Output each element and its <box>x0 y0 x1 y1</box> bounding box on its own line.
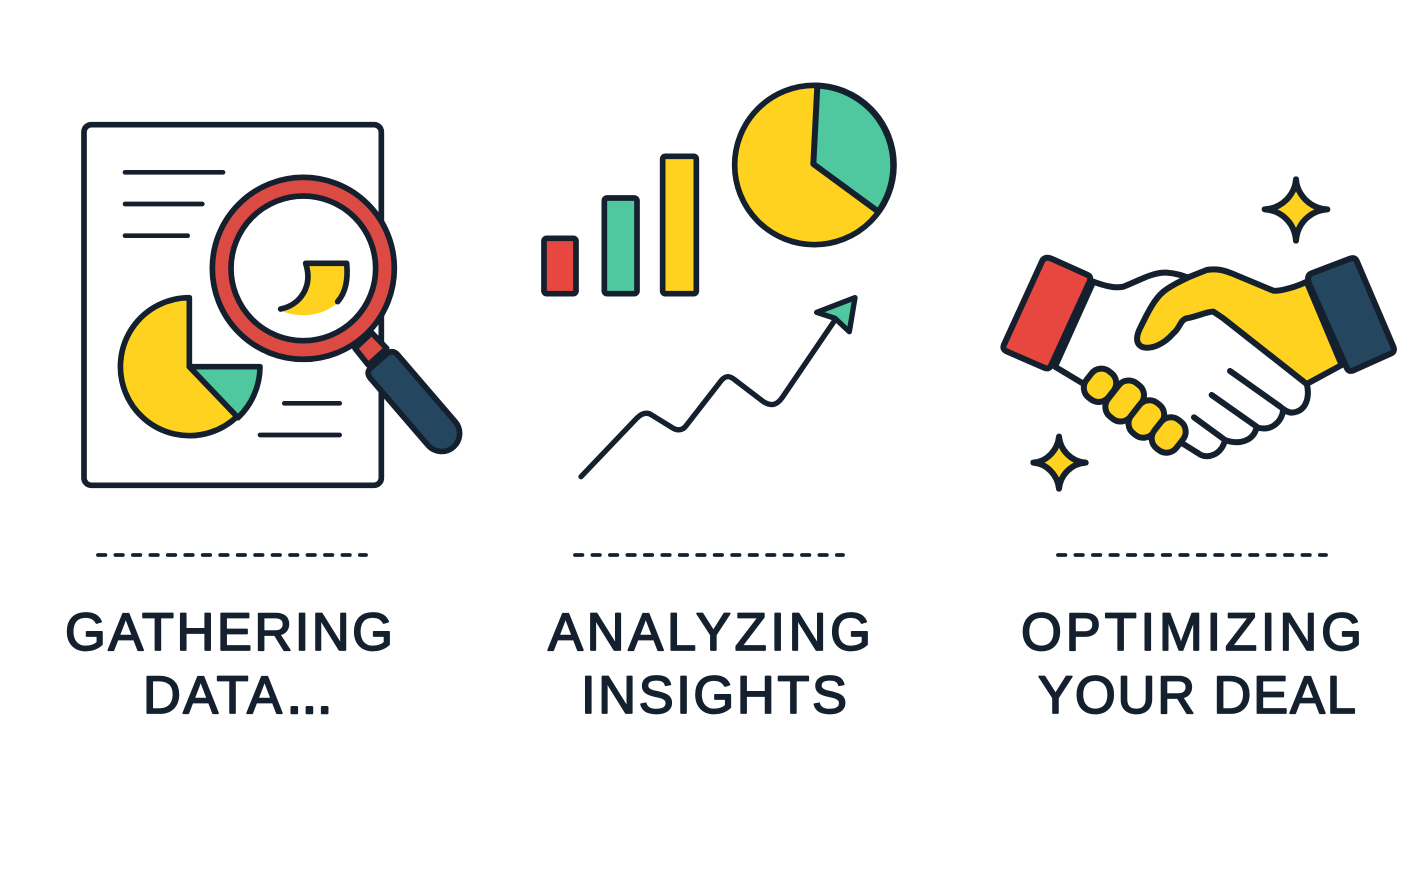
panel: gathering data icon <box>84 125 467 485</box>
heading: gathering data: GATHERING <box>65 603 393 662</box>
red cuff <box>1003 258 1090 368</box>
panel: analyzing insights icon <box>544 85 894 477</box>
heading: analyzing insights: ANALYZING <box>548 603 871 662</box>
panel: optimizing deal icon <box>1003 179 1394 489</box>
white hand <box>1055 273 1308 456</box>
heading: optimizing your deal: OPTIMIZING <box>1021 603 1362 662</box>
heading: analyzing insights <box>548 603 871 725</box>
document page <box>84 125 381 485</box>
navy cuff <box>1308 258 1394 371</box>
divider: gathering <box>98 553 366 557</box>
pie chart <box>735 85 894 245</box>
heading: gathering data: ... <box>287 666 333 725</box>
pie chart in document <box>120 298 260 436</box>
bar chart <box>544 156 696 294</box>
magnifying glass <box>212 177 467 459</box>
yellow fingers <box>1079 364 1191 458</box>
divider: analyzing <box>575 553 843 557</box>
sparkle top <box>1265 179 1327 241</box>
heading: analyzing insights: INSIGHTS <box>581 666 847 725</box>
trend arrow <box>581 298 855 477</box>
divider: optimizing <box>1058 553 1326 557</box>
document text lines <box>125 172 340 435</box>
heading: gathering data: DATA <box>143 666 282 725</box>
heading: gathering data <box>65 603 393 725</box>
sparkle bottom <box>1033 437 1086 489</box>
heading: optimizing your deal <box>1021 603 1362 725</box>
yellow hand <box>1137 269 1342 384</box>
heading: optimizing your deal: YOUR DEAL <box>1038 666 1356 725</box>
